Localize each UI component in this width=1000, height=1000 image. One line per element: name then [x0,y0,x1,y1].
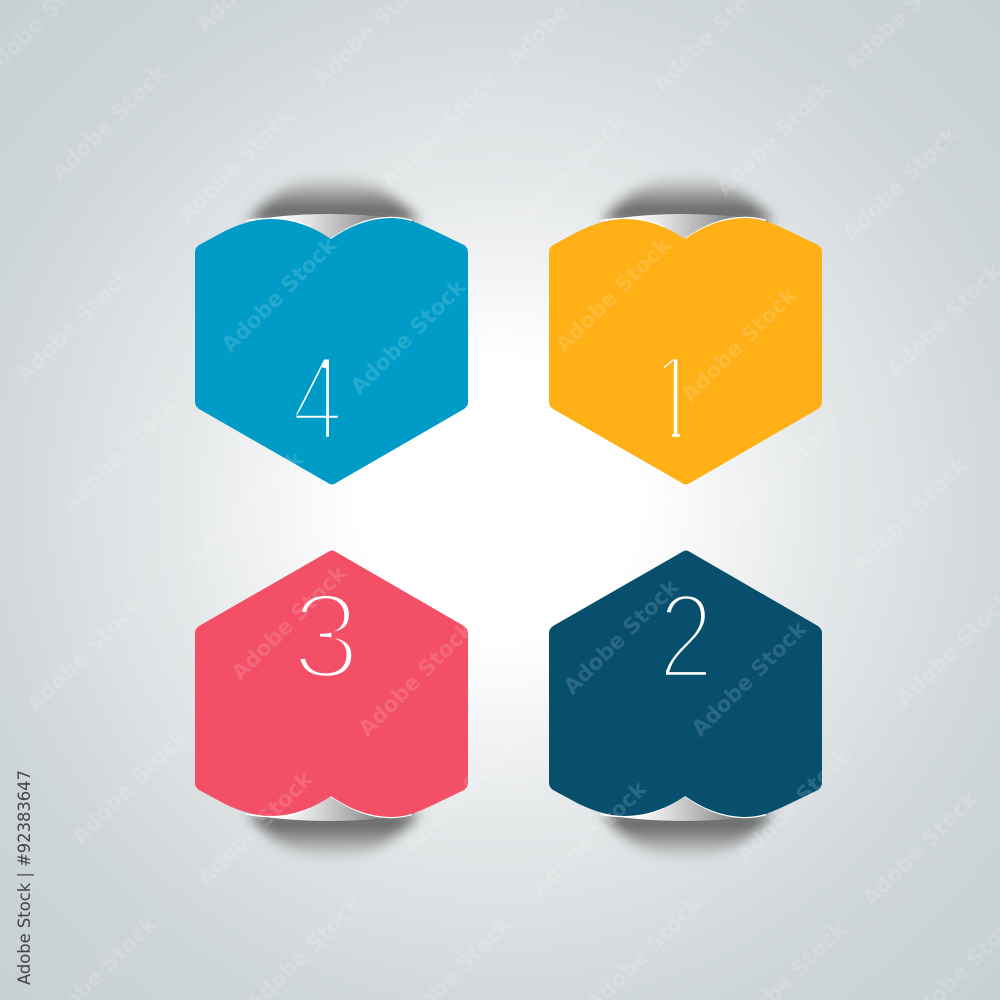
panel: 2 navy [549,550,822,859]
watermarks: Adobe Stock [527,776,652,902]
watermarks: Adobe Stock [551,232,676,358]
watermarks: Adobe Stock [838,121,963,247]
watermarks: Adobe Stock [514,450,639,576]
watermarks: Adobe Stock [47,60,172,186]
watermarks: Adobe Stock [732,742,857,868]
watermarks: Adobe Stock [722,408,847,534]
watermarks: Adobe Stock [227,560,352,686]
watermarks: Adobe Stock [848,452,973,578]
watermarks: Adobe Stock [12,262,137,388]
number 1: 1 [646,330,702,466]
watermarks: Adobe Stock [687,616,812,742]
panel: 3 red [195,550,468,859]
watermarks: Adobe Stock [22,592,147,718]
number 2: 2 [658,568,713,704]
watermarks: Adobe Stock [57,392,182,518]
stock id label: Adobe Stock | #92383647 [15,770,35,985]
watermarks: Adobe Stock [506,110,631,236]
watermarks: Adobe Stock [712,76,837,202]
watermarks: Adobe Stock [399,732,524,858]
watermarks: Adobe Stock [67,724,192,850]
panel: 1 yellow [549,176,822,484]
watermarks: Adobe Stock [677,282,802,408]
number 4: 4 [292,329,343,466]
watermarks: Adobe Stock [559,574,684,700]
panel: 4 blue [195,176,468,484]
watermarks: Adobe Stock [174,102,299,228]
number 3: 3 [292,568,360,704]
watermarks: Adobe Stock [858,786,983,912]
watermarks: Adobe Stock [389,402,514,528]
watermarks: Adobe Stock [378,68,503,194]
watermarks: Adobe Stock [346,274,471,400]
watermarks: Adobe Stock [217,232,342,358]
watermarks: Adobe Stock [184,446,309,572]
watermarks: Adobe Stock [193,766,318,892]
watermarks: Adobe Stock [354,616,479,742]
